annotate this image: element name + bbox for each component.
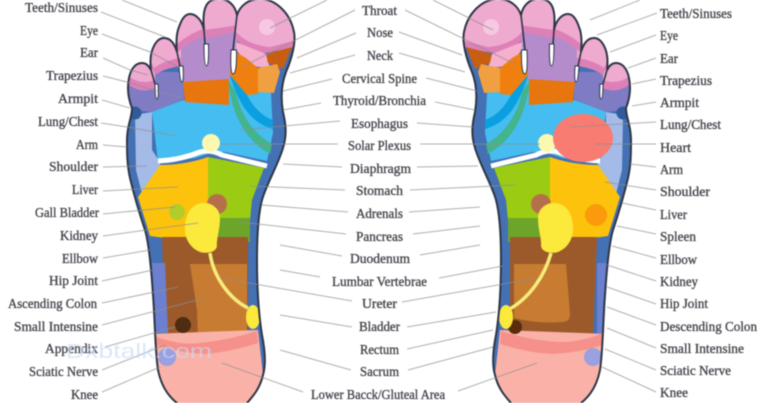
- label: Descending Colon: [660, 320, 757, 335]
- label: Diaphragm: [350, 162, 411, 177]
- label: Ellbow: [660, 253, 698, 268]
- label: Small Intensine: [14, 320, 98, 335]
- label: Arm: [76, 138, 98, 153]
- label: Teeth/Sinuses: [25, 1, 98, 16]
- label: Teeth/Sinuses: [660, 7, 732, 22]
- label: Arm: [660, 163, 683, 178]
- label: Liver: [660, 208, 687, 223]
- label: Kidney: [60, 229, 98, 244]
- watermark: Dxbtalk.com: [66, 341, 212, 363]
- label: Lumbar Vertebrae: [332, 275, 427, 290]
- label: Ellbow: [62, 252, 99, 267]
- label: Kidney: [660, 275, 698, 290]
- label: Bladder: [359, 320, 400, 335]
- label: Lower Bacck/Gluteal Area: [311, 388, 446, 403]
- label: Ascending Colon: [8, 297, 97, 312]
- label: Ear: [660, 52, 678, 67]
- label: Heart: [660, 141, 691, 156]
- label: Throat: [362, 4, 397, 19]
- label: Shoulder: [660, 185, 710, 200]
- label: Sciatic Nerve: [660, 364, 731, 379]
- label: Shoulder: [49, 160, 98, 175]
- label: Armpit: [58, 92, 98, 107]
- label: Neck: [367, 49, 393, 64]
- label: Hip Joint: [49, 274, 98, 289]
- right foot diagram: [458, 0, 638, 403]
- labels: right foot: [660, 7, 757, 401]
- label: Pancreas: [356, 230, 403, 245]
- label: Knee: [660, 386, 688, 401]
- label: Adrenals: [356, 207, 403, 222]
- label: Armpit: [660, 96, 699, 111]
- labels: left foot: [8, 1, 99, 403]
- label: Duodenum: [350, 252, 410, 267]
- right foot heart zone: [553, 114, 613, 162]
- label: Hip Joint: [660, 297, 708, 312]
- label: Ureter: [362, 297, 397, 312]
- label: Small Intensine: [660, 342, 744, 357]
- leader lines: [101, 0, 657, 392]
- label: Trapezius: [660, 74, 712, 89]
- left foot toes: [125, 0, 298, 90]
- label: Solar Plexus: [348, 139, 411, 154]
- label: Lung/Chest: [660, 118, 721, 133]
- label: Sacrum: [360, 365, 399, 380]
- label: Nose: [367, 26, 393, 41]
- label: Thyroid/Bronchia: [333, 94, 427, 109]
- label: Spleen: [660, 230, 696, 245]
- label: Eye: [80, 24, 98, 39]
- label: Knee: [71, 388, 98, 403]
- label: Gall Bladder: [35, 206, 99, 221]
- label: Eye: [660, 29, 678, 44]
- label: Liver: [72, 183, 98, 198]
- label: Sciatic Nerve: [29, 365, 98, 380]
- right foot toes: [460, 0, 633, 90]
- label: Rectum: [360, 343, 399, 358]
- labels: centre column: [311, 4, 446, 403]
- left foot diagram: [120, 0, 300, 403]
- label: Ear: [80, 46, 98, 61]
- label: Cervical Spine: [342, 72, 417, 87]
- label: Trapezius: [46, 69, 98, 84]
- label: Appendix: [45, 342, 98, 357]
- label: Esophagus: [351, 117, 408, 132]
- label: Stomach: [356, 184, 403, 199]
- label: Lung/Chest: [38, 115, 98, 130]
